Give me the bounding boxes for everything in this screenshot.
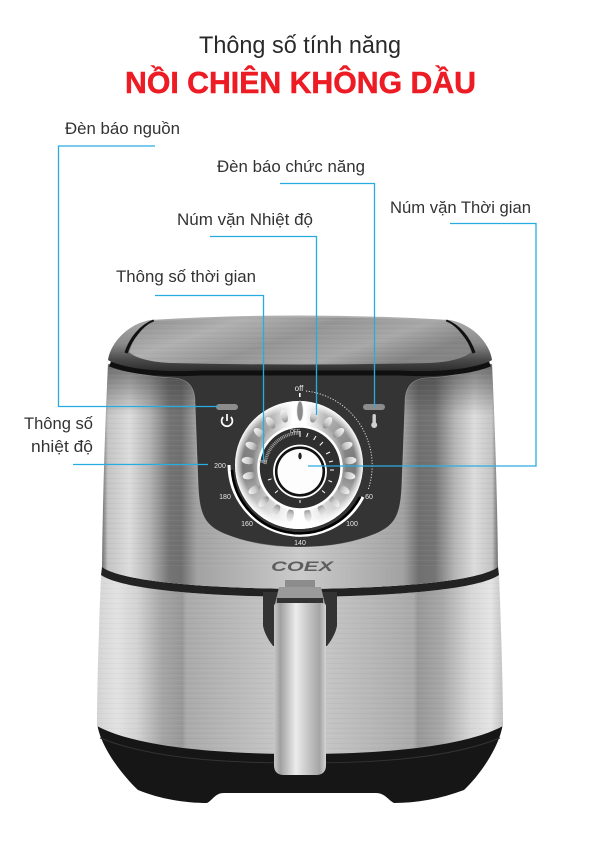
- power indicator light: [216, 404, 238, 410]
- callout: Đèn báo nguồn: [58, 120, 218, 406]
- black separator band: [101, 567, 499, 597]
- title: main heading: NỒI CHIÊN KHÔNG DẦU: [125, 64, 476, 100]
- callout: Đèn báo chức năng: Đèn báo chức năng: [217, 158, 365, 176]
- scale labels: off: [295, 384, 304, 393]
- callout: Thông số nhiệt độ: nhiệt độ: [31, 438, 93, 456]
- upper steel body: [102, 364, 498, 568]
- callout: Thông số thời gian: [116, 268, 264, 461]
- lid steel top plate: [129, 318, 471, 364]
- callout: Thông số nhiệt độ: [24, 415, 208, 464]
- timer min label: min: [259, 459, 267, 465]
- scale labels: 100: [346, 521, 358, 528]
- handle black mount: [263, 592, 337, 646]
- timer grey tick band: [265, 433, 300, 464]
- air fryer product illustration: [97, 316, 503, 803]
- scale arc: [229, 465, 363, 535]
- function indicator light: [363, 404, 385, 410]
- handle clear cap: [275, 580, 325, 604]
- scale labels: 60: [365, 494, 373, 501]
- band edge fill below curve: [102, 566, 498, 589]
- black base: [97, 722, 503, 803]
- callout: Núm vặn Thời gian: Núm vặn Thời gian: [390, 199, 531, 217]
- scale labels: 160: [241, 521, 253, 528]
- timer ring: [258, 426, 342, 510]
- lid rim: [108, 316, 492, 372]
- COEX logo: COEX: [271, 558, 336, 574]
- timer off label: OFF: [290, 429, 300, 435]
- dotted scale arc: [306, 391, 372, 490]
- knob pointer: [298, 453, 302, 459]
- scale labels: 180: [219, 494, 231, 501]
- dial shadow arc: [232, 470, 360, 533]
- base seam: [100, 738, 500, 763]
- off tick: [299, 393, 301, 397]
- temperature dial: [235, 401, 363, 529]
- temperature pointer: [297, 401, 303, 421]
- icon: thermometer: [371, 414, 377, 428]
- scale labels: 140: [294, 540, 306, 547]
- dial ribs: [241, 409, 357, 522]
- steel handle: [274, 603, 326, 775]
- scale labels: 200: [214, 463, 226, 470]
- callout: Thông số thời gian: Thông số thời gian: [116, 268, 256, 286]
- callout: Núm vặn Thời gian: [308, 199, 536, 466]
- dark control panel: [108, 364, 492, 547]
- callout: Đèn báo nguồn: Đèn báo nguồn: [65, 120, 180, 138]
- callout: Núm vặn Nhiệt độ: [177, 211, 316, 415]
- time knob: [274, 446, 326, 498]
- rim black lower strip: [110, 364, 490, 374]
- title: subtitle: Thông số tính năng: [199, 32, 401, 59]
- callout: Núm vặn Nhiệt độ: Núm vặn Nhiệt độ: [177, 211, 313, 229]
- lower basket steel body: [97, 575, 503, 754]
- timer white ticks: [268, 431, 334, 503]
- lid inner shadow crescents: [126, 321, 474, 353]
- callout: Thông số nhiệt độ: Thông số: [24, 415, 93, 433]
- callout: Đèn báo chức năng: [217, 158, 374, 407]
- scale labels: [214, 384, 373, 547]
- icon: power: [222, 414, 232, 426]
- dial disc: [235, 401, 363, 529]
- temperature scale: [214, 384, 373, 547]
